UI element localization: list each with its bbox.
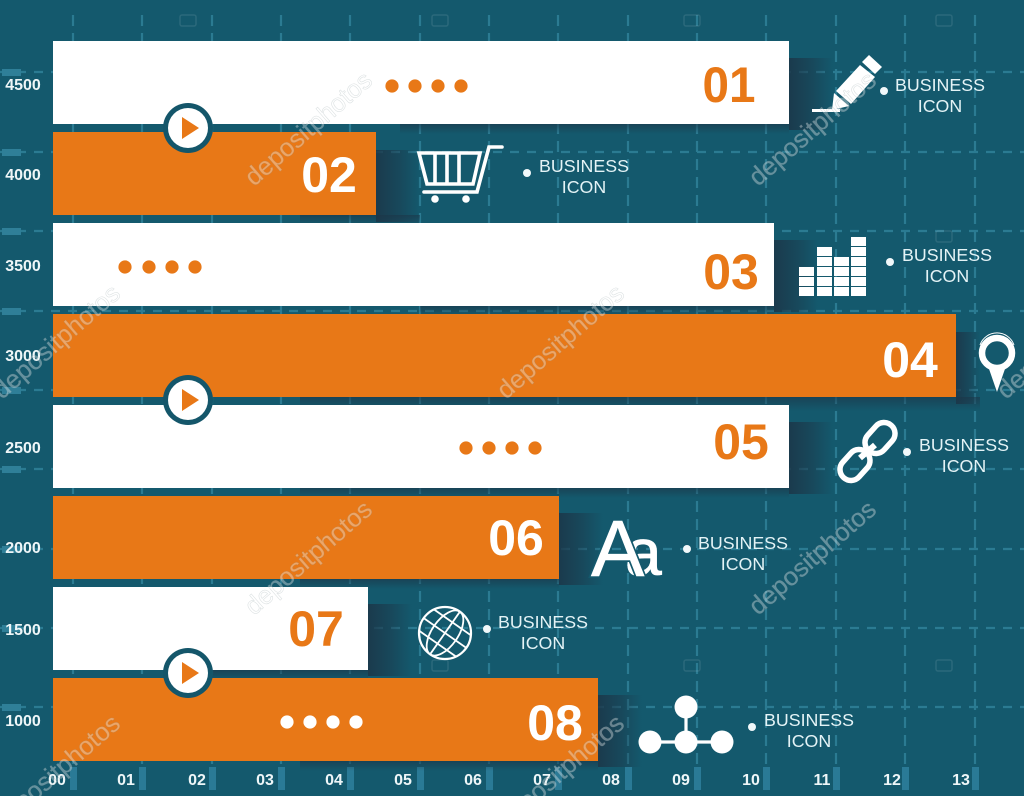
- icon: pencil: [812, 55, 882, 112]
- play button 2: [163, 375, 213, 425]
- label 02: [523, 156, 629, 197]
- bar 08: [53, 678, 598, 761]
- watermarks: depositphotos: [240, 66, 378, 192]
- label 05: ICON: [942, 456, 986, 476]
- x axis labels: 04: [325, 772, 343, 789]
- icon: equalizer: [799, 237, 866, 296]
- bar 05: [53, 405, 789, 488]
- dots on bar 01: [385, 79, 468, 93]
- number 02: 02: [301, 147, 357, 203]
- label 01: [880, 75, 985, 116]
- play button 3: [163, 648, 213, 698]
- x axis labels: 01: [117, 772, 135, 789]
- y axis tick marks: [2, 69, 21, 711]
- x axis labels: 08: [602, 772, 620, 789]
- x axis labels: 10: [742, 772, 760, 789]
- y axis labels: 4000: [5, 167, 41, 184]
- x axis labels: 05: [394, 772, 412, 789]
- label 06: BUSINESS: [698, 533, 788, 553]
- icon: chain link: [835, 418, 900, 485]
- play button 1: [163, 103, 213, 153]
- bar 07: [53, 587, 368, 670]
- label 05: [903, 435, 1009, 476]
- number 05: 05: [713, 414, 769, 470]
- label 05: BUSINESS: [919, 435, 1009, 455]
- x axis labels: 09: [672, 772, 690, 789]
- x axis labels: 07: [533, 772, 551, 789]
- label 03: BUSINESS: [902, 245, 992, 265]
- icon: shopping cart: [419, 147, 502, 203]
- y axis labels: 1000: [5, 713, 41, 730]
- icon: typography Aa: A: [591, 504, 645, 593]
- x axis labels: 06: [464, 772, 482, 789]
- x axis labels: 12: [883, 772, 901, 789]
- label 08: BUSINESS: [764, 710, 854, 730]
- watermarks: depositphotos: [744, 66, 882, 192]
- watermark camera marks: [180, 15, 952, 671]
- label 06: ICON: [721, 554, 765, 574]
- x axis labels: [48, 772, 970, 789]
- dots on bar 08: [280, 715, 363, 729]
- label 07: ICON: [521, 633, 565, 653]
- bar shadows: [200, 58, 980, 771]
- watermarks: depositphotos: [744, 495, 882, 621]
- icon: typography Aa: A: [591, 504, 645, 593]
- bar 06: [53, 496, 559, 579]
- number 07: 07: [288, 601, 344, 657]
- icon: network nodes: [638, 696, 734, 754]
- y axis labels: [5, 77, 41, 730]
- label 07: BUSINESS: [498, 612, 588, 632]
- bar 03: [53, 223, 774, 306]
- bar 04: [53, 314, 956, 397]
- label 06: [683, 533, 788, 574]
- number 06: 06: [488, 510, 544, 566]
- y axis labels: 3000: [5, 348, 41, 365]
- label 02: BUSINESS: [539, 156, 629, 176]
- x axis tick marks: [70, 767, 979, 790]
- icon: globe: [409, 597, 481, 669]
- label 07: [483, 612, 588, 653]
- watermarks: depositphotos: [492, 279, 630, 405]
- y axis labels: 1500: [5, 622, 41, 639]
- label 01: BUSINESS: [895, 75, 985, 95]
- x axis labels: 13: [952, 772, 970, 789]
- watermarks: depositphotos: [240, 495, 378, 621]
- icon: typography Aa: a: [625, 515, 662, 589]
- x axis labels: 02: [188, 772, 206, 789]
- label 02: ICON: [562, 177, 606, 197]
- label 03: [886, 245, 992, 286]
- x axis labels: 00: [48, 772, 66, 789]
- y axis labels: 4500: [5, 77, 41, 94]
- y axis labels: 3500: [5, 258, 41, 275]
- label 08: [748, 710, 854, 751]
- dots on bar 03: [118, 260, 202, 274]
- bar 02: [53, 132, 376, 215]
- number 03: 03: [703, 244, 759, 300]
- number 01: 01: [702, 57, 756, 113]
- bar 01: [53, 41, 789, 124]
- label 03: ICON: [925, 266, 969, 286]
- dots on bar 05: [459, 441, 542, 455]
- x axis labels: 03: [256, 772, 274, 789]
- icon: map pin: [980, 333, 1014, 392]
- number 04: 04: [882, 332, 938, 388]
- label 01: ICON: [918, 96, 962, 116]
- label 08: ICON: [787, 731, 831, 751]
- y axis labels: 2500: [5, 440, 41, 457]
- number 08: 08: [527, 695, 583, 751]
- y axis labels: 2000: [5, 540, 41, 557]
- x axis labels: 11: [814, 772, 831, 789]
